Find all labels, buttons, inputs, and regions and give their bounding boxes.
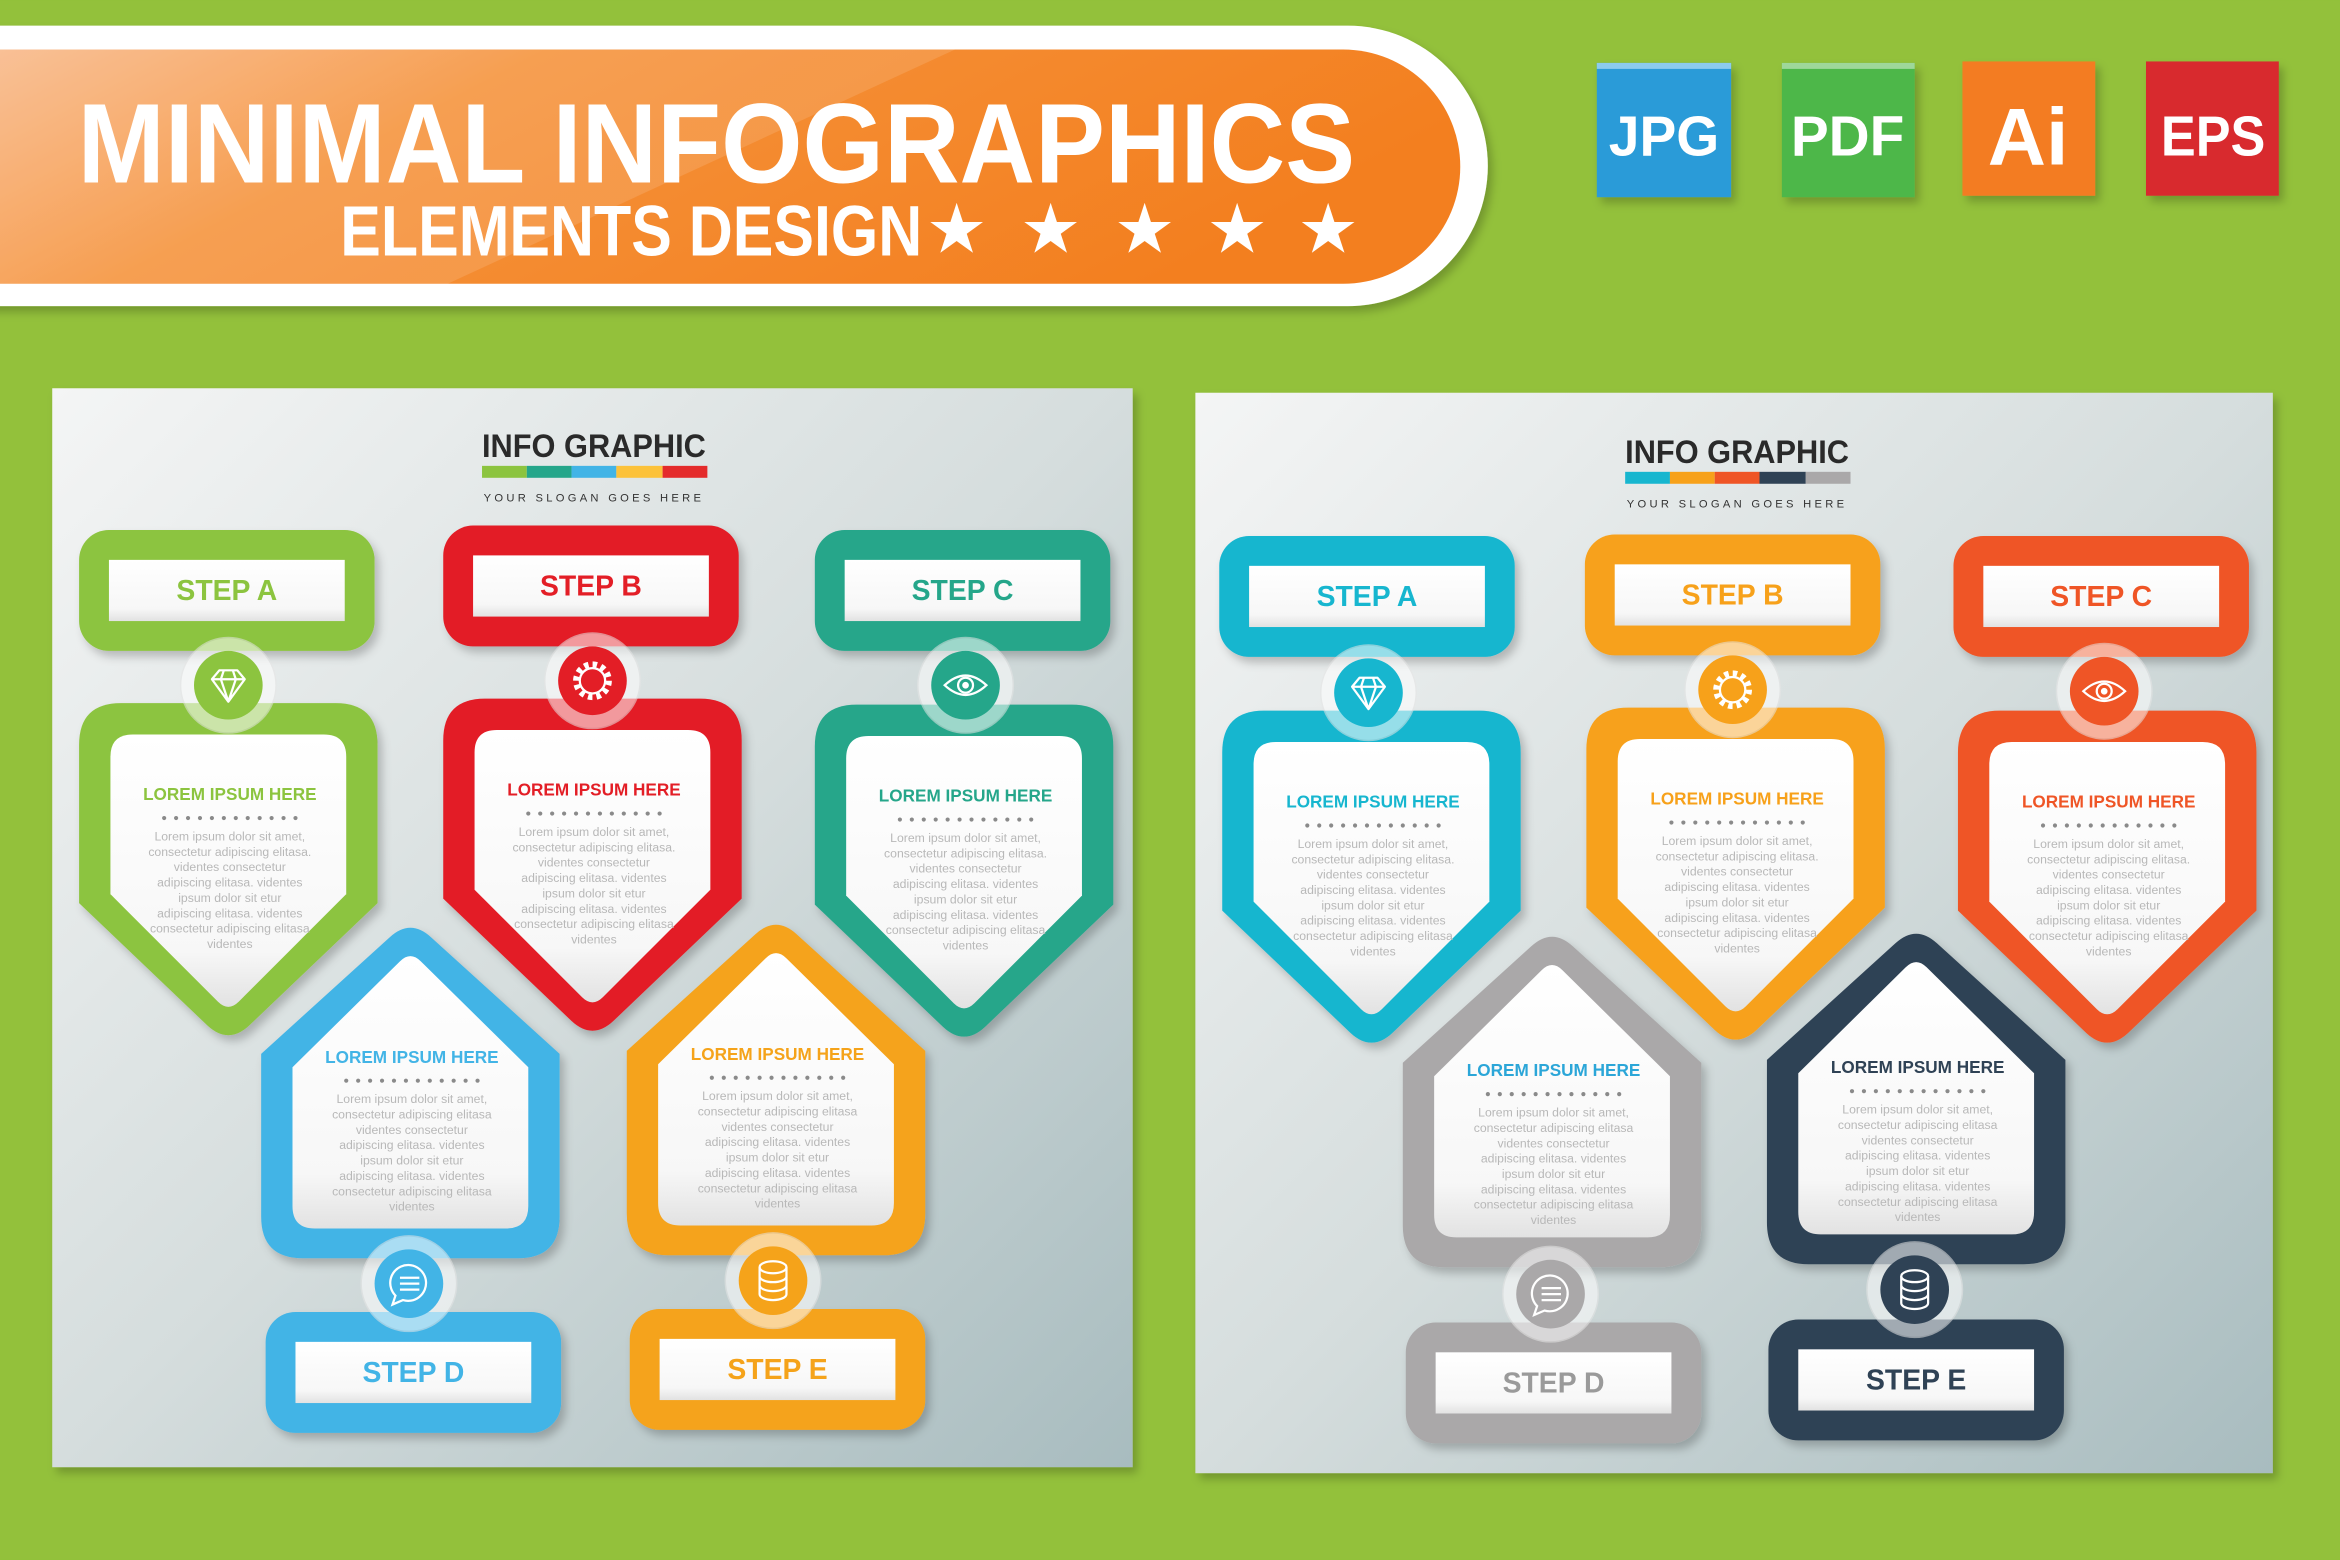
step A (left) [79,530,378,1035]
step E (right) [1767,934,2065,1440]
step E (right): Lorem ipsum dolor sit amet, [1842,1103,1993,1117]
step B (left): adipiscing elitasa. videntes [521,902,667,916]
step E (left): ipsum dolor sit etur [726,1151,829,1165]
step C (right): ipsum dolor sit etur [2057,898,2160,912]
step E (right): consectetur adipiscing elitasa [1838,1195,1998,1209]
icon: coins [725,1233,821,1328]
icon: diamond [1321,645,1416,740]
step C (left): consectetur adipiscing elitasa [886,923,1046,937]
step A (left): LOREM IPSUM HERE [143,784,317,804]
step C (left): videntes [943,939,988,953]
step A (left): consectetur adipiscing elitasa [150,922,310,936]
stars: ★ [1206,189,1268,269]
step D (left): videntes consectetur [356,1123,468,1137]
step D (right): consectetur adipiscing elitasa [1474,1121,1634,1135]
badge: PDF [1782,63,1915,197]
step A (left): STEP A [176,575,277,607]
step D (right): videntes [1531,1213,1576,1227]
step C (left): Lorem ipsum dolor sit amet, [890,831,1041,845]
step D (left): LOREM IPSUM HERE [325,1047,499,1067]
step A (left): adipiscing elitasa. videntes [157,906,303,920]
step A (left): ipsum dolor sit etur [178,891,281,905]
step B (right): adipiscing elitasa. videntes [1664,880,1810,894]
step A (left): videntes [207,937,253,951]
step D (right): videntes consectetur [1497,1136,1610,1150]
step C (left): consectetur adipiscing elitasa. [884,846,1047,860]
title text: MINIMAL INFOGRAPHICS [78,80,1355,207]
icon: gear [1685,642,1780,737]
step A (right): ipsum dolor sit etur [1321,898,1425,912]
subtitle with stars: ELEMENTS DESIGN [340,191,922,271]
step B (left): consectetur adipiscing elitasa [514,917,674,931]
panel: right infographic [1195,393,2273,1473]
step E (right): consectetur adipiscing elitasa [1838,1118,1998,1132]
step E (left) [627,925,925,1430]
step A (right): STEP A [1317,581,1417,613]
badge: JPG: JPG [1609,105,1719,168]
step C (left): videntes consectetur [910,862,1022,876]
step A (right): adipiscing elitasa. videntes [1300,914,1446,928]
step B (right): consectetur adipiscing elitasa. [1656,849,1819,863]
badge: PDF: PDF [1791,105,1904,168]
step B (left): STEP B [540,571,642,603]
icon: chat [361,1236,457,1331]
step B (left): Lorem ipsum dolor sit amet, [519,825,669,839]
step C (left): LOREM IPSUM HERE [879,786,1052,806]
step C (right): adipiscing elitasa. videntes [2036,914,2181,928]
step D (left): consectetur adipiscing elitasa [332,1107,492,1121]
step C (right): consectetur adipiscing elitasa [2029,929,2189,943]
step D (right): consectetur adipiscing elitasa [1474,1198,1634,1212]
step D (left): ipsum dolor sit etur [360,1154,464,1168]
step E (left): consectetur adipiscing elitasa [698,1181,858,1195]
badge: EPS [2146,61,2279,196]
step D (right): STEP D [1503,1368,1604,1400]
stars: ★ [926,189,987,269]
step B (right): Lorem ipsum dolor sit amet, [1662,834,1812,848]
step C (right): consectetur adipiscing elitasa. [2027,852,2190,866]
panel heading: YOUR SLOGAN GOES HERE [484,493,704,505]
step C (left): adipiscing elitasa. videntes [893,877,1038,891]
badge: Ai [1962,61,2095,196]
step C (left): ipsum dolor sit etur [914,892,1017,906]
step B (left): ipsum dolor sit etur [542,886,646,900]
step A (left): Lorem ipsum dolor sit amet, [154,829,305,843]
icon: coins [1867,1242,1962,1337]
badge: JPG [1597,63,1731,197]
step B (right): LOREM IPSUM HERE [1650,789,1824,809]
step C (left) [815,530,1113,1037]
step A (right): adipiscing elitasa. videntes [1300,883,1446,897]
step C (right): STEP C [2050,581,2152,613]
step D (left): consectetur adipiscing elitasa [332,1184,492,1198]
step E (left): STEP E [727,1354,828,1386]
panel: left infographic [52,388,1133,1467]
icon: chat [1503,1246,1598,1342]
step B (right): STEP B [1682,580,1784,612]
step C (right): adipiscing elitasa. videntes [2036,883,2181,897]
step D (left): STEP D [362,1357,464,1389]
step B (right): videntes consectetur [1681,865,1793,879]
step B (left): consectetur adipiscing elitasa. [512,840,675,854]
step D (right): LOREM IPSUM HERE [1467,1060,1640,1080]
format badges [1597,61,2279,197]
step B (right) [1585,535,1885,1040]
stars: ★ [1020,189,1081,269]
step A (right): LOREM IPSUM HERE [1286,792,1460,812]
step E (left): Lorem ipsum dolor sit amet, [702,1089,853,1103]
icon: eye [2056,643,2152,739]
step A (right): videntes [1350,945,1396,959]
step B (left): adipiscing elitasa. videntes [521,871,667,885]
step B (right): consectetur adipiscing elitasa [1657,926,1817,940]
icon: eye [918,637,1013,733]
badge: EPS: EPS [2161,105,2265,168]
panel heading [1625,433,1851,511]
step D (left): videntes [389,1200,435,1214]
step A (right): consectetur adipiscing elitasa [1293,929,1453,943]
step D (left): adipiscing elitasa. videntes [339,1169,485,1183]
step D (left): Lorem ipsum dolor sit amet, [337,1092,487,1106]
step E (right): adipiscing elitasa. videntes [1845,1179,1990,1193]
step D (right): adipiscing elitasa. videntes [1481,1182,1626,1196]
stars [926,189,1359,269]
badge: Ai: Ai [1988,92,2068,182]
step E (right): STEP E [1866,1365,1966,1397]
icon: gear [545,633,640,729]
step D (left): adipiscing elitasa. videntes [339,1138,485,1152]
icon: diamond [181,637,276,733]
step D (left) [261,928,561,1433]
stars: ★ [1297,189,1359,269]
step E (left): adipiscing elitasa. videntes [705,1135,850,1149]
step A (right): consectetur adipiscing elitasa. [1291,852,1454,866]
step E (right): videntes [1895,1210,1940,1224]
step C (right): LOREM IPSUM HERE [2022,792,2195,812]
step E (left): consectetur adipiscing elitasa [698,1104,858,1118]
step D (right) [1403,937,1701,1443]
step B (left): LOREM IPSUM HERE [507,780,681,800]
panel heading: INFO GRAPHIC [1625,433,1849,470]
step A (right): Lorem ipsum dolor sit amet, [1298,837,1448,851]
panel heading [482,427,707,505]
panel heading: INFO GRAPHIC [482,427,706,464]
step C (right): Lorem ipsum dolor sit amet, [2033,837,2184,851]
step E (right): ipsum dolor sit etur [1866,1164,1969,1178]
step D (right): Lorem ipsum dolor sit amet, [1478,1106,1629,1120]
step A (right) [1219,536,1521,1043]
step B (left): videntes consectetur [538,856,650,870]
step C (right): videntes [2086,945,2131,959]
step B (right): videntes [1714,942,1760,956]
step E (left): videntes [755,1197,800,1211]
step E (left): adipiscing elitasa. videntes [705,1166,850,1180]
step B (left): videntes [571,933,617,947]
step C (left): adipiscing elitasa. videntes [893,908,1038,922]
panel heading: YOUR SLOGAN GOES HERE [1627,499,1847,511]
step C (left): STEP C [912,575,1014,607]
step C (right) [1953,536,2256,1043]
header banner [0,26,1488,306]
step C (right): videntes consectetur [2053,868,2165,882]
stars: ★ [1114,189,1175,269]
step B (right): adipiscing elitasa. videntes [1664,911,1810,925]
step A (left): adipiscing elitasa. videntes [157,876,303,890]
step B (right): ipsum dolor sit etur [1685,895,1789,909]
step B (left) [443,526,742,1031]
step E (right): videntes consectetur [1862,1133,1974,1147]
step E (left): videntes consectetur [721,1120,834,1134]
step A (left): videntes consectetur [174,860,286,874]
step E (right): adipiscing elitasa. videntes [1845,1149,1990,1163]
step D (right): adipiscing elitasa. videntes [1481,1152,1626,1166]
step A (right): videntes consectetur [1317,868,1429,882]
step E (right): LOREM IPSUM HERE [1831,1057,2004,1077]
step E (left): LOREM IPSUM HERE [691,1044,864,1064]
step A (left): consectetur adipiscing elitasa. [148,845,311,859]
step D (right): ipsum dolor sit etur [1502,1167,1605,1181]
